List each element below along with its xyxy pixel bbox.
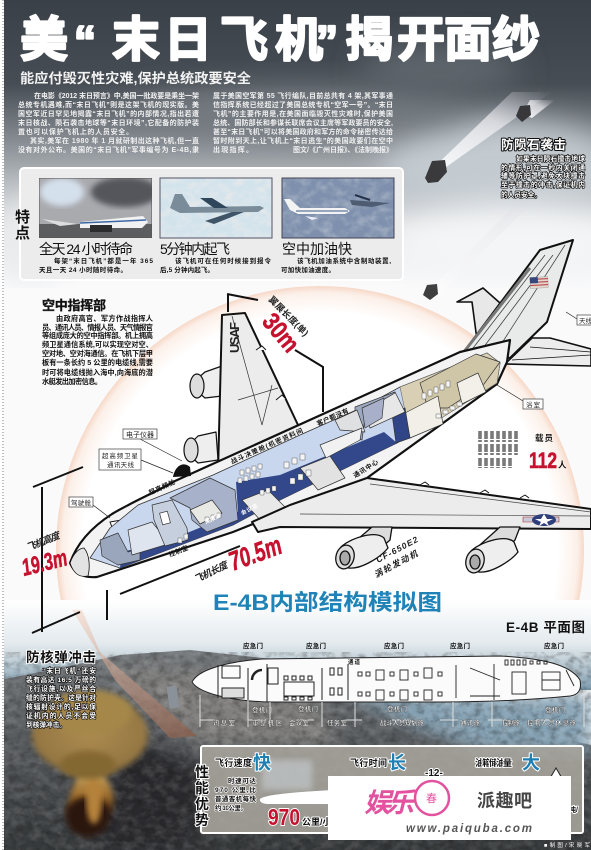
icon: US flag — [530, 277, 548, 289]
fuel capacity: 大 — [522, 753, 540, 773]
feature 1 caption: 每架“末日飞机”都是一年 365 — [54, 256, 153, 265]
label: satellite antenna: 通讯天线 — [107, 460, 134, 469]
plan: compartment labels — [213, 718, 576, 727]
dimension line: aircraft length — [107, 546, 240, 620]
title: ” — [316, 17, 338, 66]
dimension: height — [19, 529, 70, 582]
feature 2 caption: 后,5 分钟内起飞。 — [160, 265, 214, 274]
feature 2 caption: 5分钟内起飞 — [160, 241, 230, 257]
aircraft illustration — [70, 240, 591, 577]
intro text block — [18, 91, 393, 154]
plan: compartment labels: 任务室 — [327, 718, 348, 727]
heading: features: 特 — [15, 208, 30, 226]
title: 面 — [444, 14, 492, 67]
callout: command centre — [42, 298, 154, 386]
plan: boarding door labels: 登机门 — [545, 705, 565, 714]
tail fin — [463, 240, 573, 358]
intro text block: 在电影《2012 末日预言》中,美国一批政要是乘坐一架 — [34, 91, 199, 100]
callout: command centre: 等组成庞大的空中指挥部。机上拥高 — [42, 331, 153, 340]
title: 飞 — [220, 14, 268, 67]
label: electronics: 电子仪器 — [126, 430, 154, 439]
rear tan compartment — [400, 353, 500, 425]
dimension: height: 飞机高度 — [25, 529, 63, 554]
engine label: 涡轮发动机 — [372, 548, 420, 580]
endurance: -12- — [425, 768, 443, 779]
engine label: CF-650E2 — [374, 534, 420, 565]
cabin labels: 简报室 — [203, 511, 222, 526]
plan: boarding door labels — [252, 704, 565, 714]
heading: floor plan: E-4B 平面图 — [506, 620, 585, 635]
plan: emergency door labels — [243, 641, 564, 666]
peach beam from mushroom cloud — [72, 610, 197, 738]
cabin labels: 客户都没有 — [315, 406, 350, 428]
endurance — [350, 753, 443, 779]
callout: command centre: 水艇发出加密信息。 — [42, 377, 102, 386]
speed: 快 — [253, 753, 271, 773]
plan: compartment labels: 讯息室 — [213, 718, 236, 727]
photo: aircraft on the ground — [39, 177, 159, 238]
icon: crew silhouettes — [480, 431, 516, 468]
plan: boarding door labels: 登机门 — [387, 704, 407, 713]
plan: compartment labels: 重整机区 — [252, 718, 282, 727]
far wing — [218, 313, 300, 472]
dimension line: wingspan — [227, 294, 323, 412]
plan: rear cabins — [505, 660, 574, 694]
heading: performance: 性 — [195, 764, 209, 780]
plan: compartment labels: 战斗人员规划舱 — [380, 718, 424, 727]
plan: compartment labels: 会议室 — [289, 718, 310, 727]
engine label — [372, 534, 420, 580]
title: “ — [74, 17, 96, 66]
plan: emergency door labels: 应急门 — [450, 641, 470, 650]
intro text block: 国空军近日罕见地揭露“末日飞机”的内部情况,指出若遭 — [18, 109, 199, 118]
speed: 约 10公里。 — [215, 803, 247, 812]
callout: meteor strike — [501, 137, 585, 199]
intro text block: 没有对外公布。美国的“末日飞机”军事编号为 E-4B,隶 — [18, 145, 199, 154]
feature 3 caption: 空中加油快 — [282, 241, 352, 257]
speed — [215, 753, 341, 830]
heading: performance: 势 — [195, 812, 209, 828]
feature 2 caption: 该飞机可在任何时候接到报令 — [175, 256, 272, 265]
intro text block: 置也可以保护飞机上的人员安全。 — [18, 127, 133, 136]
callout: meteor strike: 至于撞击的冲击,保证机内 — [501, 180, 585, 189]
callout: meteor strike: 防陨石袭击 — [501, 137, 566, 152]
label: bathroom: 浴室 — [526, 400, 540, 409]
callout: command centre: 空对地、空对海通信。在飞机下层甲 — [42, 349, 153, 358]
cabin labels: 会议室 — [239, 502, 259, 517]
intro text block: 飞机”的主要作用是,在美国面临毁灭性灾难时,保护美国 — [213, 109, 393, 118]
callout: nuclear impact — [26, 649, 96, 729]
label: electronics — [123, 429, 182, 461]
heading: features: 点 — [15, 224, 30, 242]
watermark: www.paiquba.com — [406, 823, 532, 835]
floor plan diagram — [192, 641, 584, 727]
label: bathroom — [497, 385, 543, 409]
passenger seats — [178, 381, 462, 543]
heading: interior diagram: E-4B内部结构模拟图 — [213, 590, 442, 615]
panel: features — [15, 168, 403, 280]
callout: meteor strike: 的情形,可在一秒内关闭通 — [501, 163, 585, 172]
plan: compartment labels: 控制人员休息舱 — [527, 718, 576, 727]
panel: performance — [195, 746, 583, 833]
cabin labels: 控制室 — [167, 543, 190, 559]
label: cockpit — [69, 497, 110, 518]
callout: meteor strike: 如果末日陨石撞击地球 — [516, 154, 585, 163]
dimension: length — [192, 530, 286, 586]
plan: cockpit and offices — [218, 664, 348, 702]
cabin labels: 通讯中心 — [351, 457, 380, 480]
title: 开 — [397, 14, 445, 67]
cutaway interior — [90, 353, 500, 568]
plan: battle staff seating — [358, 664, 500, 700]
background: glow ring behind aircraft — [56, 286, 584, 814]
intro text block: 暂时附到天上,让飞机上“末日逃生”的美国政要们在空中 — [213, 136, 393, 145]
intro text block: 末日核战、陨石袭击地球等“末日环境”,它配备的防护装 — [18, 118, 199, 127]
heading: performance: 优 — [195, 796, 209, 812]
feature 1 caption: 全天 24 小时待命 — [39, 241, 133, 257]
label: satellite antenna — [99, 449, 173, 473]
callout: nuclear impact: “末日飞机”还安 — [42, 666, 96, 675]
title: 机 — [275, 14, 323, 67]
intro text block: 图文/《广州日报》、《法制晚报》 — [293, 145, 393, 154]
intro text block: 属于美国空军第 55 飞行编队,目前总共有 4 架,其军事通 — [213, 91, 393, 100]
far wing: USAF — [227, 322, 242, 353]
heading: features — [15, 208, 30, 242]
callout: nuclear impact: 到核弹冲击。 — [26, 720, 66, 729]
speed: 飞行速度 — [215, 757, 252, 768]
plan: emergency door labels: 通道 — [348, 658, 360, 666]
watermark: 派趣吧 — [477, 791, 532, 811]
left page edge dots — [0, 0, 4, 850]
cabin labels: 战斗决策舱(机密资料间 — [229, 426, 305, 466]
horizontal stabilisers — [457, 288, 591, 366]
rooms — [100, 354, 500, 565]
fuel capacity: 吨/ — [569, 805, 578, 814]
dimension: length: 飞机长度 — [192, 558, 231, 586]
intro text block: 出現指挥。 — [213, 145, 253, 154]
mushroom cloud — [32, 690, 148, 837]
title: 纱 — [492, 14, 540, 67]
crew count: 人 — [558, 460, 567, 470]
callout: meteor strike: 辅等防护罩,避免大块撞击 — [501, 171, 585, 180]
callout: command centre: 板有一条长约 5 公里的电缆线,需要 — [42, 358, 153, 367]
heading: performance — [195, 764, 209, 828]
plan: emergency door labels: 应急门 — [243, 641, 263, 650]
callout: command centre: 频卫星通信系统,可以实现空对空、 — [42, 340, 153, 349]
intro text block: 甚至“末日飞机”可以将美国政府和军方的命令秘密传达给 — [213, 127, 393, 136]
heading: performance: 能 — [195, 780, 209, 796]
title — [20, 14, 540, 67]
background: white lower sky — [0, 600, 591, 690]
plan: compartment labels: 控制舱 — [502, 718, 520, 727]
radome: satellite antenna dome — [173, 464, 191, 477]
dimension: length: 70.5m — [225, 530, 286, 577]
callout: command centre: 员、通讯人员、情报人员、天气情报官 — [42, 323, 153, 332]
photo: aerial refuelling — [282, 178, 394, 238]
speed: 公里/小时 — [302, 816, 341, 827]
near engines — [333, 527, 520, 575]
plan: emergency door labels: 应急门 — [384, 641, 404, 650]
plan: emergency door labels: 应急门 — [544, 641, 564, 650]
far engines — [184, 366, 222, 463]
speed: 普通客机每快 — [215, 794, 256, 803]
intro text block: 总统专机遇难,而“末日飞机”则是这架飞机的现实版。美 — [18, 100, 199, 109]
dimension: wingspan: 30m — [256, 308, 305, 358]
endurance: 飞行时间 — [350, 757, 387, 768]
label: satellite antenna: 超高频卫星 — [102, 451, 138, 460]
plan: boarding door labels: 登机门 — [298, 704, 318, 713]
fuel capacity: 油箱储油量 — [475, 757, 512, 768]
callout: nuclear impact: 核辐射设计的,足以保 — [26, 702, 96, 711]
callout: nuclear impact: 装有高达 16.5 万磅的 — [26, 675, 96, 684]
crew count — [480, 431, 567, 473]
intro text block: 总统、国防部长和参谋长联席会议主席等军政要员的安全, — [213, 118, 393, 127]
plan: emergency door labels: 应急门 — [306, 641, 326, 650]
near wing — [252, 478, 591, 532]
title: 美 — [20, 14, 68, 67]
plan: compartment labels: 通讯舱 — [460, 718, 480, 727]
cabin labels — [147, 406, 380, 559]
cabin labels: 超高频舱 — [147, 477, 177, 497]
plan: boarding door labels: 登机门 — [252, 705, 272, 714]
speed: 970 — [268, 804, 300, 830]
feature 2 caption — [160, 241, 272, 274]
watermark: 娱乐 — [364, 788, 417, 818]
title: 揭 — [345, 14, 393, 67]
feature 1 caption: 天且一天 24 小时随时待命。 — [39, 265, 127, 274]
dimension: wingspan: 翼展长度(单) — [267, 294, 311, 338]
callout: nuclear impact: 防核弹冲击 — [26, 649, 96, 665]
icon: USAF roundel — [523, 514, 559, 526]
subtitle: 能应付毁灭性灾难,保护总统政要安全 — [20, 70, 252, 86]
title: 日 — [164, 14, 212, 67]
dimension line: aircraft height — [32, 467, 83, 633]
speed: 970 公里,比 — [215, 785, 256, 794]
endurance: 长 — [388, 753, 406, 773]
callout: command centre: 时可将电缆线抛入海中,向海底的潜 — [42, 368, 154, 377]
callout: meteor strike: 的人员安全。 — [501, 190, 541, 199]
watermark: 春 — [426, 792, 437, 805]
crew count: 112 — [529, 448, 557, 473]
label: antenna — [566, 312, 591, 325]
callout: nuclear impact: 证机内的人员不会受 — [26, 711, 96, 720]
dimension: wingspan — [256, 294, 311, 358]
background: ruined city — [0, 650, 591, 850]
intro text block: 其实,美军在 1980 年 1 月就研制出这种飞机,但一直 — [30, 136, 199, 145]
callout: nuclear impact: 飞行设施,以及严丝合 — [26, 684, 96, 693]
callout: command centre: 空中指挥部 — [42, 298, 106, 313]
watermark — [328, 776, 571, 840]
background: storm sky — [0, 0, 591, 638]
credit: ■制图/宋晓军 — [544, 841, 590, 849]
photo: aircraft in flight over clouds — [160, 178, 272, 238]
feature 1 caption — [39, 241, 153, 274]
crew count: 载员 — [535, 433, 553, 443]
fuselage — [70, 340, 510, 577]
navy floor — [120, 432, 397, 568]
intro text block: 信指挥系统已经超过了美国总统专机“空军一号”。“末日 — [213, 100, 393, 109]
speed: 时速可达 — [228, 776, 256, 785]
plan outline — [192, 656, 581, 702]
callout: nuclear impact: 缝的防护壳。这是针对 — [26, 693, 96, 702]
dimension: height: 19.3m — [19, 544, 70, 582]
plan: compartment guide lines — [200, 690, 584, 727]
feature 3 caption: 该飞机加油系统中含制动装置, — [297, 256, 391, 265]
meteors — [423, 92, 555, 300]
fuel capacity — [475, 753, 578, 814]
feature 3 caption: 可加快加油速度。 — [281, 265, 335, 274]
nose cone and cockpit window — [70, 518, 134, 576]
label: cockpit: 驾驶舱 — [71, 498, 92, 507]
callout: command centre: 由政府高官、军方作战指挥人 — [56, 314, 154, 323]
title: 末 — [112, 14, 160, 67]
feature 3 caption — [281, 241, 391, 274]
